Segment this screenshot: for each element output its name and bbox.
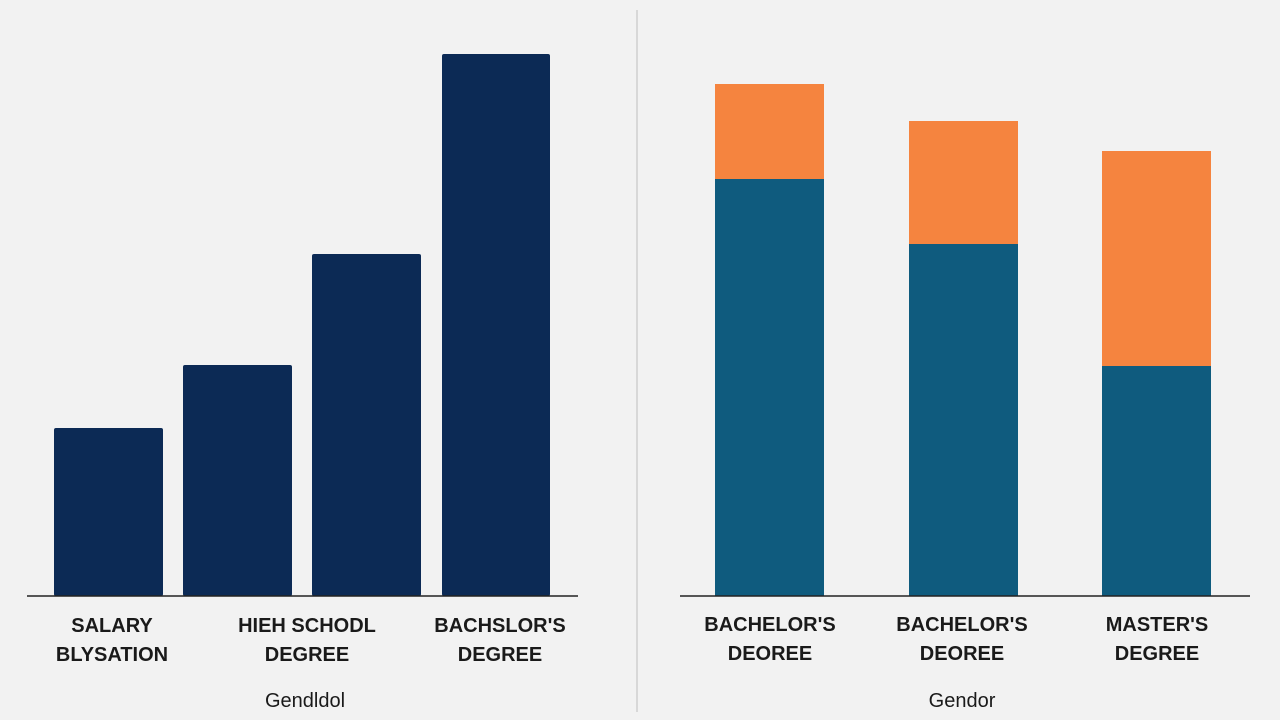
stacked bar 1	[715, 84, 824, 596]
right x labels: BACHELOR'S	[704, 614, 836, 636]
bar: third	[312, 254, 421, 596]
left x labels: DEGREE	[265, 644, 349, 666]
bar: salary	[54, 428, 163, 596]
bar: bachelor's	[442, 54, 550, 596]
left x labels: DEGREE	[458, 644, 542, 666]
left x labels	[56, 615, 566, 666]
right x labels	[704, 614, 1208, 665]
left x labels: SALARY	[71, 615, 153, 637]
left bar chart	[27, 54, 578, 712]
right x labels: DEOREE	[920, 643, 1004, 665]
bar: high school	[183, 365, 292, 596]
right stacked bar chart	[680, 84, 1250, 712]
right x labels: MASTER'S	[1106, 614, 1208, 636]
stacked bar 2	[909, 121, 1018, 596]
right x labels: BACHELOR'S	[896, 614, 1028, 636]
stacked bar 3	[1102, 151, 1211, 596]
left x labels: HIEH SCHODL	[238, 615, 376, 637]
right axis title: Gendor	[929, 690, 996, 712]
left x labels: BACHSLOR'S	[434, 615, 566, 637]
left axis title: Gendldol	[265, 690, 345, 712]
left x labels: BLYSATION	[56, 644, 168, 666]
right x labels: DEOREE	[728, 643, 812, 665]
right x labels: DEGREE	[1115, 643, 1199, 665]
